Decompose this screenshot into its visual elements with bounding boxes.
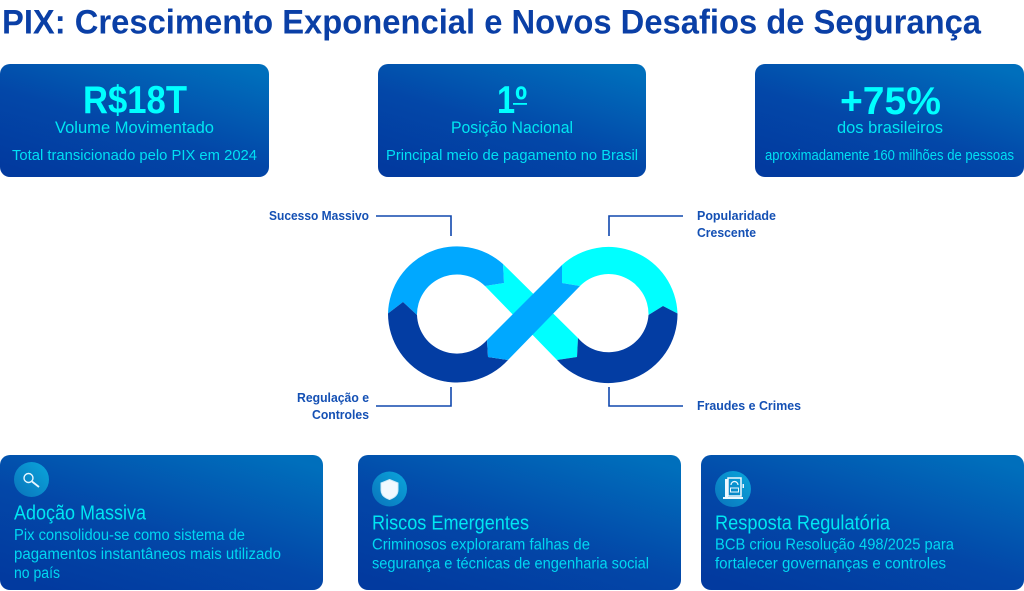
panel: adoção massiva — [0, 455, 323, 590]
body text — [14, 527, 281, 582]
stat: 1º: 1º — [497, 79, 527, 122]
callout: popularidade crescente: Crescente — [697, 225, 756, 240]
stat label: Posição Nacional — [451, 119, 573, 137]
segment: top right cyan — [562, 247, 678, 315]
callout: regulação e controles: Controles — [312, 407, 369, 422]
segment: cyan crossing — [485, 264, 578, 360]
panel: riscos emergentes — [358, 455, 681, 590]
stat label: dos brasileiros — [837, 119, 943, 137]
stat: +75%: +75% — [840, 80, 941, 123]
callout: fraudes e crimes — [609, 387, 801, 413]
callout: regulação e controles: Regulação e — [297, 390, 369, 405]
icon: regulation book — [715, 471, 751, 507]
body text — [372, 536, 649, 572]
title: PIX: Crescimento Exponencial e Novos Desafios de Segurança — [2, 4, 982, 42]
body text: Pix consolidou-se como sistema de — [14, 527, 245, 544]
heading: Resposta Regulatória — [715, 512, 891, 534]
callout: sucesso massivo — [269, 208, 451, 236]
body text: fortalecer governanças e controles — [715, 556, 946, 572]
callout: popularidade crescente: Popularidade — [697, 208, 776, 223]
stat description: Principal meio de pagamento no Brasil — [386, 148, 638, 164]
segment: bottom left dark — [388, 302, 508, 383]
body text: Criminosos exploraram falhas de — [372, 536, 590, 554]
heading: Adoção Massiva — [14, 502, 147, 524]
callout: sucesso massivo: Sucesso Massivo — [269, 208, 369, 223]
icon: magnifier — [14, 462, 49, 497]
segment: blue diagonal — [487, 265, 580, 360]
segment: bottom right dark — [557, 306, 678, 383]
panel: resposta regulatória — [701, 455, 1024, 590]
callout: popularidade crescente — [609, 208, 776, 240]
stat description: Total transicionado pelo PIX em 2024 — [12, 148, 257, 164]
panel: posição nacional — [378, 64, 646, 177]
infinity loop diagram — [388, 246, 678, 383]
panel: brasileiros — [755, 64, 1024, 177]
callout: fraudes e crimes: Fraudes e Crimes — [697, 398, 801, 413]
body text: no país — [14, 565, 60, 582]
panel: volume movimentado — [0, 64, 269, 177]
body text — [715, 536, 954, 572]
stat label: Volume Movimentado — [55, 119, 214, 137]
body text: segurança e técnicas de engenharia social — [372, 556, 649, 572]
segment: top left blue — [388, 246, 504, 315]
stat: R$18T: R$18T — [83, 79, 187, 122]
body text: pagamentos instantâneos mais utilizado — [14, 546, 281, 563]
body text: BCB criou Resolução 498/2025 para — [715, 536, 954, 554]
callout: regulação e controles — [297, 387, 451, 422]
heading: Riscos Emergentes — [372, 512, 529, 534]
icon: shield — [372, 472, 407, 506]
